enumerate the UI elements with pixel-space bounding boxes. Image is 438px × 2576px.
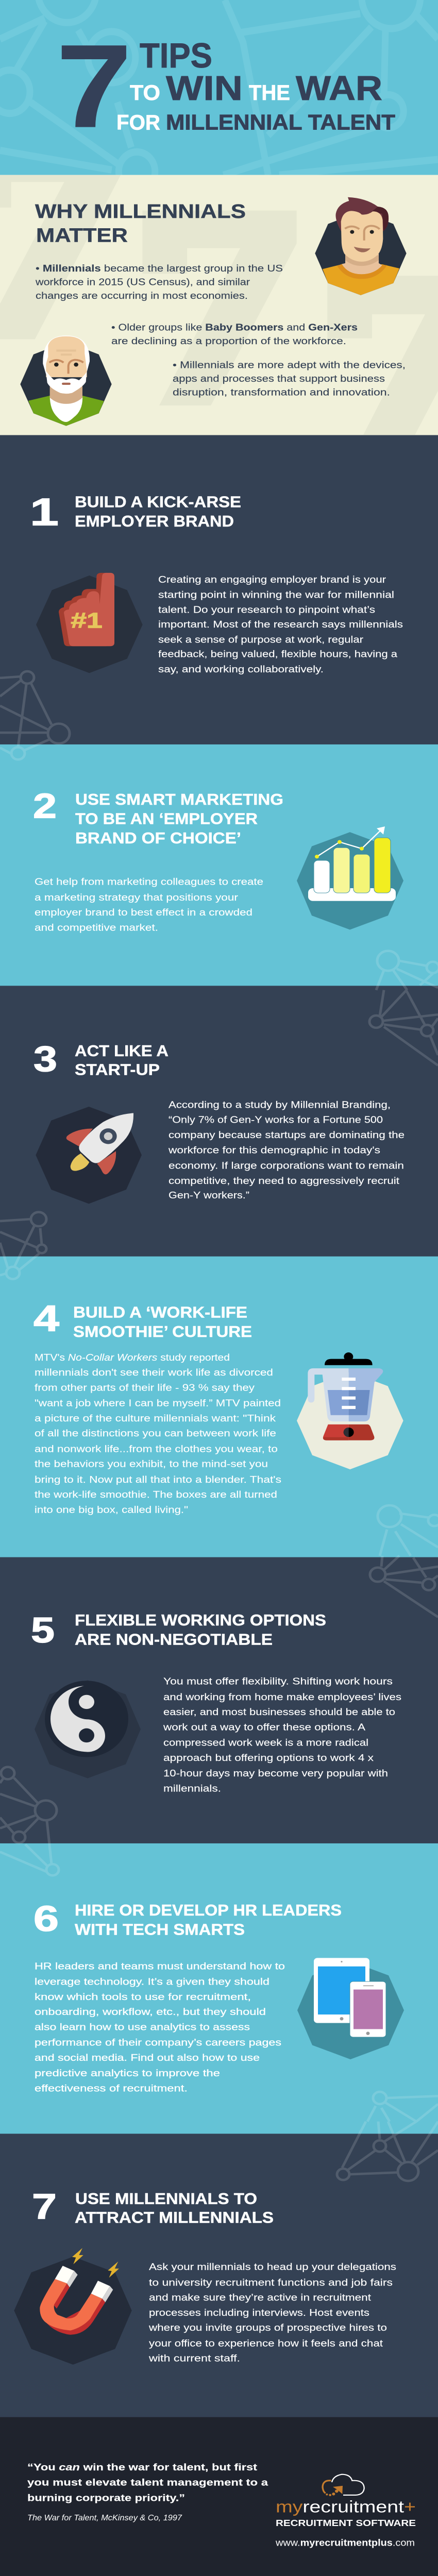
number 5: 5 xyxy=(31,1611,55,1650)
text block: Gen-Y workers.” xyxy=(169,1190,249,1201)
panel: tip 1 employer brand xyxy=(0,435,438,744)
heading: EMPLOYER BRAND xyxy=(75,512,234,530)
text block: talent. Do your research to pinpoint what’s xyxy=(158,604,375,615)
text block xyxy=(163,1676,401,1794)
heading: TO BE AN ‘EMPLOYER xyxy=(75,810,258,827)
heading: SMOOTHIE’ CULTURE xyxy=(73,1323,252,1341)
text block xyxy=(35,1352,281,1515)
title text: THE xyxy=(249,81,290,105)
text block: adept with devices: • Millennials are more adept with the devices, xyxy=(173,360,406,370)
icon: foam finger: #1 xyxy=(71,609,103,633)
text block: 10-hour days may become very popular with xyxy=(163,1768,388,1779)
heading xyxy=(35,200,246,246)
text block: compressed work week is a more radical xyxy=(163,1737,368,1748)
panel: tip 7 use millennials xyxy=(0,2134,438,2417)
heading: WITH TECH SMARTS xyxy=(75,1921,245,1938)
text block xyxy=(35,1961,285,2094)
heading: MATTER xyxy=(36,224,128,246)
heading xyxy=(75,1901,342,1938)
text block: millennials largest group: workforce in 2015 (US Census), and similar xyxy=(35,277,250,287)
text block: adept with devices: disruption, transformation and innovation. xyxy=(173,387,390,398)
icon: bar chart xyxy=(297,826,403,930)
heading: USE MILLENNIALS TO xyxy=(75,2190,257,2208)
text block: MTV's No-Collar Workers study reported xyxy=(35,1352,230,1363)
text block: adept with devices xyxy=(173,360,406,398)
text block: millennials largest group xyxy=(35,263,283,301)
heading: BUILD A KICK-ARSE xyxy=(75,493,241,511)
text block: with current staff. xyxy=(148,2353,240,2364)
icon: tablets xyxy=(297,1958,404,2059)
icon: yin yang xyxy=(35,1680,141,1778)
panel: why millennials matter xyxy=(0,175,438,435)
title text: FOR xyxy=(116,111,160,134)
heading: ATTRACT MILLENNIALS xyxy=(75,2209,274,2226)
title number 7: 7 xyxy=(56,20,132,152)
icon: young man avatar xyxy=(315,197,407,295)
number 3: 3 xyxy=(33,1039,57,1079)
title text: TIPS xyxy=(140,37,212,75)
text block: competitive, they need to aggressively recruit xyxy=(169,1176,400,1187)
quote xyxy=(27,2462,268,2503)
text block: bring to it. Now put all that into a blender. That's xyxy=(35,1475,281,1485)
logo xyxy=(275,2475,416,2548)
number 1: 1 xyxy=(30,490,59,534)
text block: a picture of the culture millennials want: "Think xyxy=(35,1413,276,1424)
text block: economy. If large corporations want to remain xyxy=(169,1160,404,1171)
text block: HR leaders and teams must understand how to xyxy=(35,1961,285,1972)
quote: you must elevate talent management to a xyxy=(27,2477,268,2488)
text block: Ask your millennials to head up your delegations xyxy=(149,2262,396,2273)
heading: ARE NON-NEGOTIABLE xyxy=(75,1631,273,1648)
text block: older groups xyxy=(111,322,358,347)
panel: tip 3 act like a start-up xyxy=(0,986,438,1257)
text block: Creating an engaging employer brand is your xyxy=(158,574,386,585)
text block: millennials largest group: changes are occurring in most economies. xyxy=(36,291,248,301)
text block: and competitive market. xyxy=(35,922,158,933)
text block: also learn how to use analytics to assess xyxy=(35,2022,250,2032)
heading xyxy=(75,493,241,530)
text block: of all the distinctions you can between work life xyxy=(35,1428,276,1439)
panel: title header xyxy=(0,0,438,191)
text block: and social media. Find out also how to use xyxy=(35,2053,260,2063)
heading: FLEXIBLE WORKING OPTIONS xyxy=(75,1612,326,1629)
text block: where you invite groups of prospective hires to xyxy=(148,2323,387,2333)
text block: a marketing strategy that positions your xyxy=(35,892,239,903)
title text xyxy=(116,37,395,134)
heading: BUILD A ‘WORK-LIFE xyxy=(73,1303,247,1321)
text block: millennials. xyxy=(163,1783,221,1794)
text block: company because startups are dominating the xyxy=(169,1130,405,1141)
panel: tip 5 flexible working xyxy=(0,1557,438,1843)
quote: “You can win the war for talent, but first xyxy=(27,2462,258,2473)
text block: approach but offering options to work 4 x xyxy=(163,1753,374,1764)
icon: rocket xyxy=(36,1107,142,1204)
text block: adept with devices: apps and processes that support business xyxy=(173,374,385,384)
panel: tip 4 work-life smoothie xyxy=(0,1257,438,1557)
text block xyxy=(148,2262,396,2364)
text block: into one big box, called living." xyxy=(35,1504,188,1515)
text block: leverage technology. It’s a given they should xyxy=(35,1976,269,1987)
icon: magnet xyxy=(14,2248,132,2365)
heading xyxy=(75,1042,169,1078)
heading xyxy=(75,1612,326,1648)
website url: www.myrecruitmentplus.com xyxy=(275,2538,415,2548)
heading: WHY MILLENNIALS xyxy=(35,200,246,222)
title text: WIN xyxy=(166,69,243,107)
panel: tip 2 smart marketing xyxy=(0,744,438,986)
text block: easier, and most businesses should be able to xyxy=(163,1707,395,1718)
panel: footer xyxy=(0,2417,438,2576)
text block xyxy=(35,876,263,933)
text block: know which tools to use for recruitment, xyxy=(35,1992,251,2003)
heading: HIRE OR DEVELOP HR LEADERS xyxy=(75,1901,342,1919)
quote source: The War for Talent, McKinsey & Co, 1997 xyxy=(27,2514,182,2522)
number 6: 6 xyxy=(33,1899,59,1939)
panel: tip 6 hr leaders xyxy=(0,1843,438,2134)
text block: workforce for this demographic in today's xyxy=(168,1145,380,1156)
title text: MILLENNIAL TALENT xyxy=(166,110,395,134)
heading: START-UP xyxy=(75,1061,160,1078)
text block: processes including interviews. Host events xyxy=(149,2308,369,2318)
text block: You must offer flexibility. Shifting work hours xyxy=(163,1676,393,1687)
text block: feedback, being valued, flexible hours, having a xyxy=(158,649,397,659)
heading: ACT LIKE A xyxy=(75,1042,169,1059)
icon: cloud xyxy=(323,2475,364,2496)
text block: predictive analytics to improve the xyxy=(35,2068,220,2079)
text block: older groups: • Older groups like Baby Boomers and Gen-Xers xyxy=(111,322,358,333)
text block: and working from home make employees’ lives xyxy=(163,1692,401,1703)
text block: to university recruitment functions and job fairs xyxy=(149,2277,393,2288)
icon: old man avatar xyxy=(20,335,112,426)
text block: the behaviors you exhibit, to the mind-set you xyxy=(35,1459,268,1470)
text block: your office to experience how it feels and chat xyxy=(149,2338,383,2349)
icon: foam finger xyxy=(36,573,143,673)
text block: onboarding, workflow, etc., but they should xyxy=(35,2007,266,2018)
number 4: 4 xyxy=(33,1297,60,1339)
text block xyxy=(158,574,403,675)
text block: performance of their company’s careers pages xyxy=(35,2037,281,2048)
text block: say, and working collaboratively. xyxy=(158,664,324,675)
text block: from other parts of their life - 93 % say they xyxy=(35,1382,255,1393)
title text: WAR xyxy=(296,69,382,107)
heading: BRAND OF CHOICE’ xyxy=(75,829,241,847)
text block: “Only 7% of Gen-Y works for a Fortune 500 xyxy=(169,1114,383,1125)
title text: TO xyxy=(130,81,160,105)
text block: employer brand to best effect in a crowded xyxy=(35,907,252,918)
text block: "want a job where I can be myself.” MTV painted xyxy=(35,1398,281,1409)
text block: millennials largest group: • Millennials became the largest group in the US xyxy=(36,263,283,274)
text block: older groups: are declining as a proportion of the workforce. xyxy=(111,336,346,347)
heading xyxy=(75,790,283,847)
logo wordmark: myrecruitment + xyxy=(276,2498,416,2516)
quote: burning corporate priority.” xyxy=(27,2493,185,2503)
heading xyxy=(75,2190,274,2226)
text block: work out a way to offer these options. A xyxy=(163,1722,366,1733)
text block: and make sure they’re active in recruitment xyxy=(149,2292,372,2303)
icon: blender xyxy=(297,1352,403,1469)
heading: USE SMART MARKETING xyxy=(75,790,283,808)
heading xyxy=(73,1303,252,1341)
text block: the work-life smoothie. The boxes are all turned xyxy=(35,1489,277,1500)
text block: millennials don't see their work life as divorced xyxy=(35,1367,273,1378)
text block xyxy=(168,1099,405,1201)
text block: important. Most of the research says millennials xyxy=(158,619,403,630)
number 7: 7 xyxy=(32,2187,57,2227)
text block: seek a sense of purpose at work, regular xyxy=(158,634,364,645)
text block: and nonwork life...from the clothes you wear, to xyxy=(35,1444,278,1454)
text block: effectiveness of recruitment. xyxy=(35,2083,188,2094)
text block: starting point in winning the war for millennial xyxy=(158,589,394,600)
text block: Get help from marketing colleagues to create xyxy=(35,876,263,887)
text block: According to a study by Millennial Branding, xyxy=(169,1099,391,1110)
logo tagline: RECRUITMENT SOFTWARE xyxy=(276,2518,416,2528)
number 2: 2 xyxy=(33,787,57,826)
